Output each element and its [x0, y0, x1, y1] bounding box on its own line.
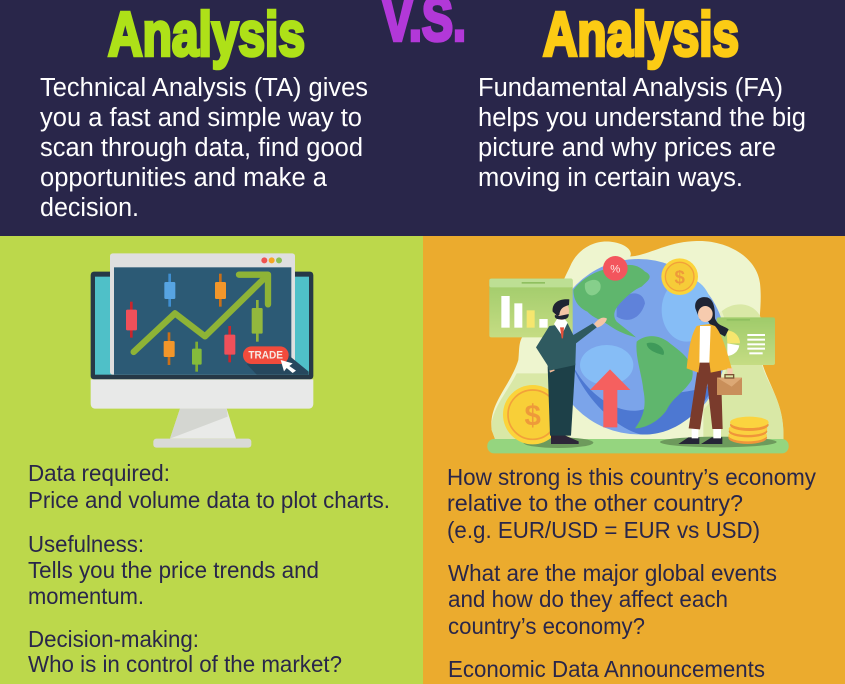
text block: fundamental analysis details: (e.g. EUR/USD = EUR vs USD)	[447, 517, 760, 543]
figure: woman	[678, 297, 742, 444]
text block: fundamental analysis intro: moving in certain ways.	[478, 164, 743, 192]
candlestick: green low	[192, 342, 202, 372]
text block: technical analysis intro: you a fast and simple way to	[40, 104, 362, 132]
text block: technical analysis details: Price and volume data to plot charts.	[28, 487, 390, 513]
candlestick: red	[126, 302, 137, 338]
text block: technical analysis details	[28, 460, 390, 684]
icon: percent badge	[603, 256, 628, 281]
icon: percent badge: %	[610, 263, 620, 275]
continent: south america	[635, 336, 693, 428]
text block: technical analysis details: Tells you the price trends and	[28, 557, 319, 583]
text block: fundamental analysis intro: Fundamental Analysis (FA)	[478, 74, 783, 102]
text block: fundamental analysis intro	[478, 74, 806, 192]
panel: pie and list card	[717, 317, 775, 365]
panel: fundamental analysis background	[423, 236, 845, 684]
icon: red up arrow	[590, 369, 630, 427]
panel: technical analysis background	[0, 236, 423, 684]
heading: left Analysis: Analysis	[108, 0, 305, 70]
figure: businessman	[536, 299, 607, 444]
text block: technical analysis intro	[40, 74, 368, 222]
text block: fundamental analysis details: country’s economy?	[448, 613, 645, 639]
candlestick: red right	[224, 326, 235, 362]
icon: large dollar coin	[503, 385, 562, 444]
text block: technical analysis details: Data required:	[28, 460, 170, 486]
text block: fundamental analysis details	[447, 464, 816, 682]
icon: large dollar coin: $	[525, 399, 541, 432]
text block: fundamental analysis details: How strong is this country’s economy	[447, 464, 816, 490]
button: TRADE: TRADE	[248, 350, 283, 362]
text block: fundamental analysis details: and how do they affect each	[448, 586, 728, 612]
text block: technical analysis details: Usefulness:	[28, 531, 144, 557]
ground	[487, 439, 789, 453]
text block: technical analysis intro: scan through data, find good	[40, 134, 363, 162]
heading: right Analysis: Analysis	[543, 0, 739, 70]
icon: dollar coin top: $	[674, 266, 685, 287]
button: TRADE	[243, 346, 289, 364]
text block: technical analysis details: Who is in control of the market?	[28, 651, 342, 677]
arrow: rising trend line	[134, 275, 268, 352]
text block: fundamental analysis details: relative to the other country?	[447, 490, 743, 516]
continent: north america	[573, 265, 650, 337]
text block: technical analysis intro: Technical Analysis (TA) gives	[40, 74, 368, 102]
icon: coin stack	[728, 417, 769, 444]
text block: technical analysis intro: opportunities and make a	[40, 164, 328, 192]
text block: technical analysis details: momentum.	[28, 583, 144, 609]
text block: fundamental analysis intro: picture and why prices are	[478, 134, 776, 162]
candlestick: green	[252, 300, 263, 342]
text block: technical analysis intro: decision.	[40, 194, 139, 222]
icon: dollar coin top	[661, 258, 698, 295]
icon: cursor	[281, 360, 296, 373]
candlestick: blue	[164, 274, 175, 307]
candlestick: orange low	[164, 332, 175, 365]
panel: bar chart card	[489, 279, 573, 337]
icon: computer monitor with trading chart	[91, 253, 313, 448]
candlestick: orange	[215, 274, 226, 307]
panel: dark header	[0, 0, 845, 236]
text block: fundamental analysis details: Economic Data Announcements	[448, 656, 765, 682]
illustration: global economy with two people	[487, 241, 789, 453]
text block: fundamental analysis intro: helps you understand the big	[478, 104, 806, 132]
text block: fundamental analysis details: What are the major global events	[448, 560, 777, 586]
text block: technical analysis details: Decision-making:	[28, 626, 199, 652]
globe	[548, 256, 729, 437]
